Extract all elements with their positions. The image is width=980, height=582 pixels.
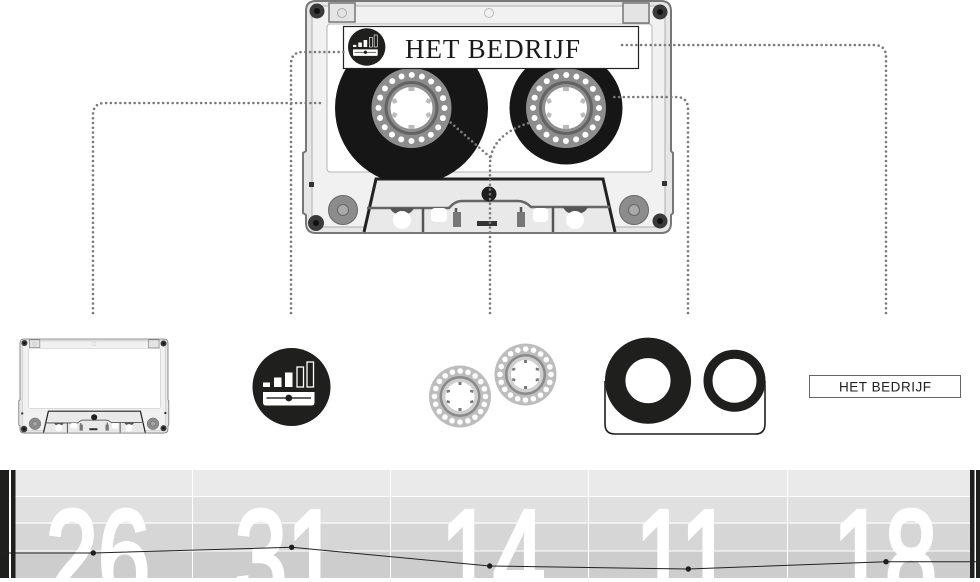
component: label strip [810, 376, 960, 398]
label box [344, 26, 638, 68]
chart background bands [15, 470, 970, 578]
left hub [372, 68, 452, 148]
component: empty cassette shell [19, 339, 169, 433]
left end bars [0, 470, 16, 578]
component: tape spools [605, 338, 766, 434]
component: logo badge [252, 348, 330, 426]
left tape spool [335, 69, 488, 179]
dotted connector: hubs [450, 122, 532, 313]
component: label strip: HET BEDRIJF [839, 380, 931, 394]
line chart [0, 545, 980, 572]
dotted connector: tape [613, 97, 688, 313]
right hub [526, 68, 606, 148]
right tape spool [510, 52, 622, 164]
dotted connector: logo [291, 52, 346, 313]
right end bars [970, 470, 980, 578]
dotted connector: shell [93, 103, 322, 313]
cassette tape illustration [303, 1, 673, 233]
component: reels [429, 344, 556, 428]
dotted connector: name [620, 45, 886, 313]
icon: logo on label [348, 28, 385, 66]
title: het bedrijf: HET BEDRIJF [405, 34, 580, 64]
